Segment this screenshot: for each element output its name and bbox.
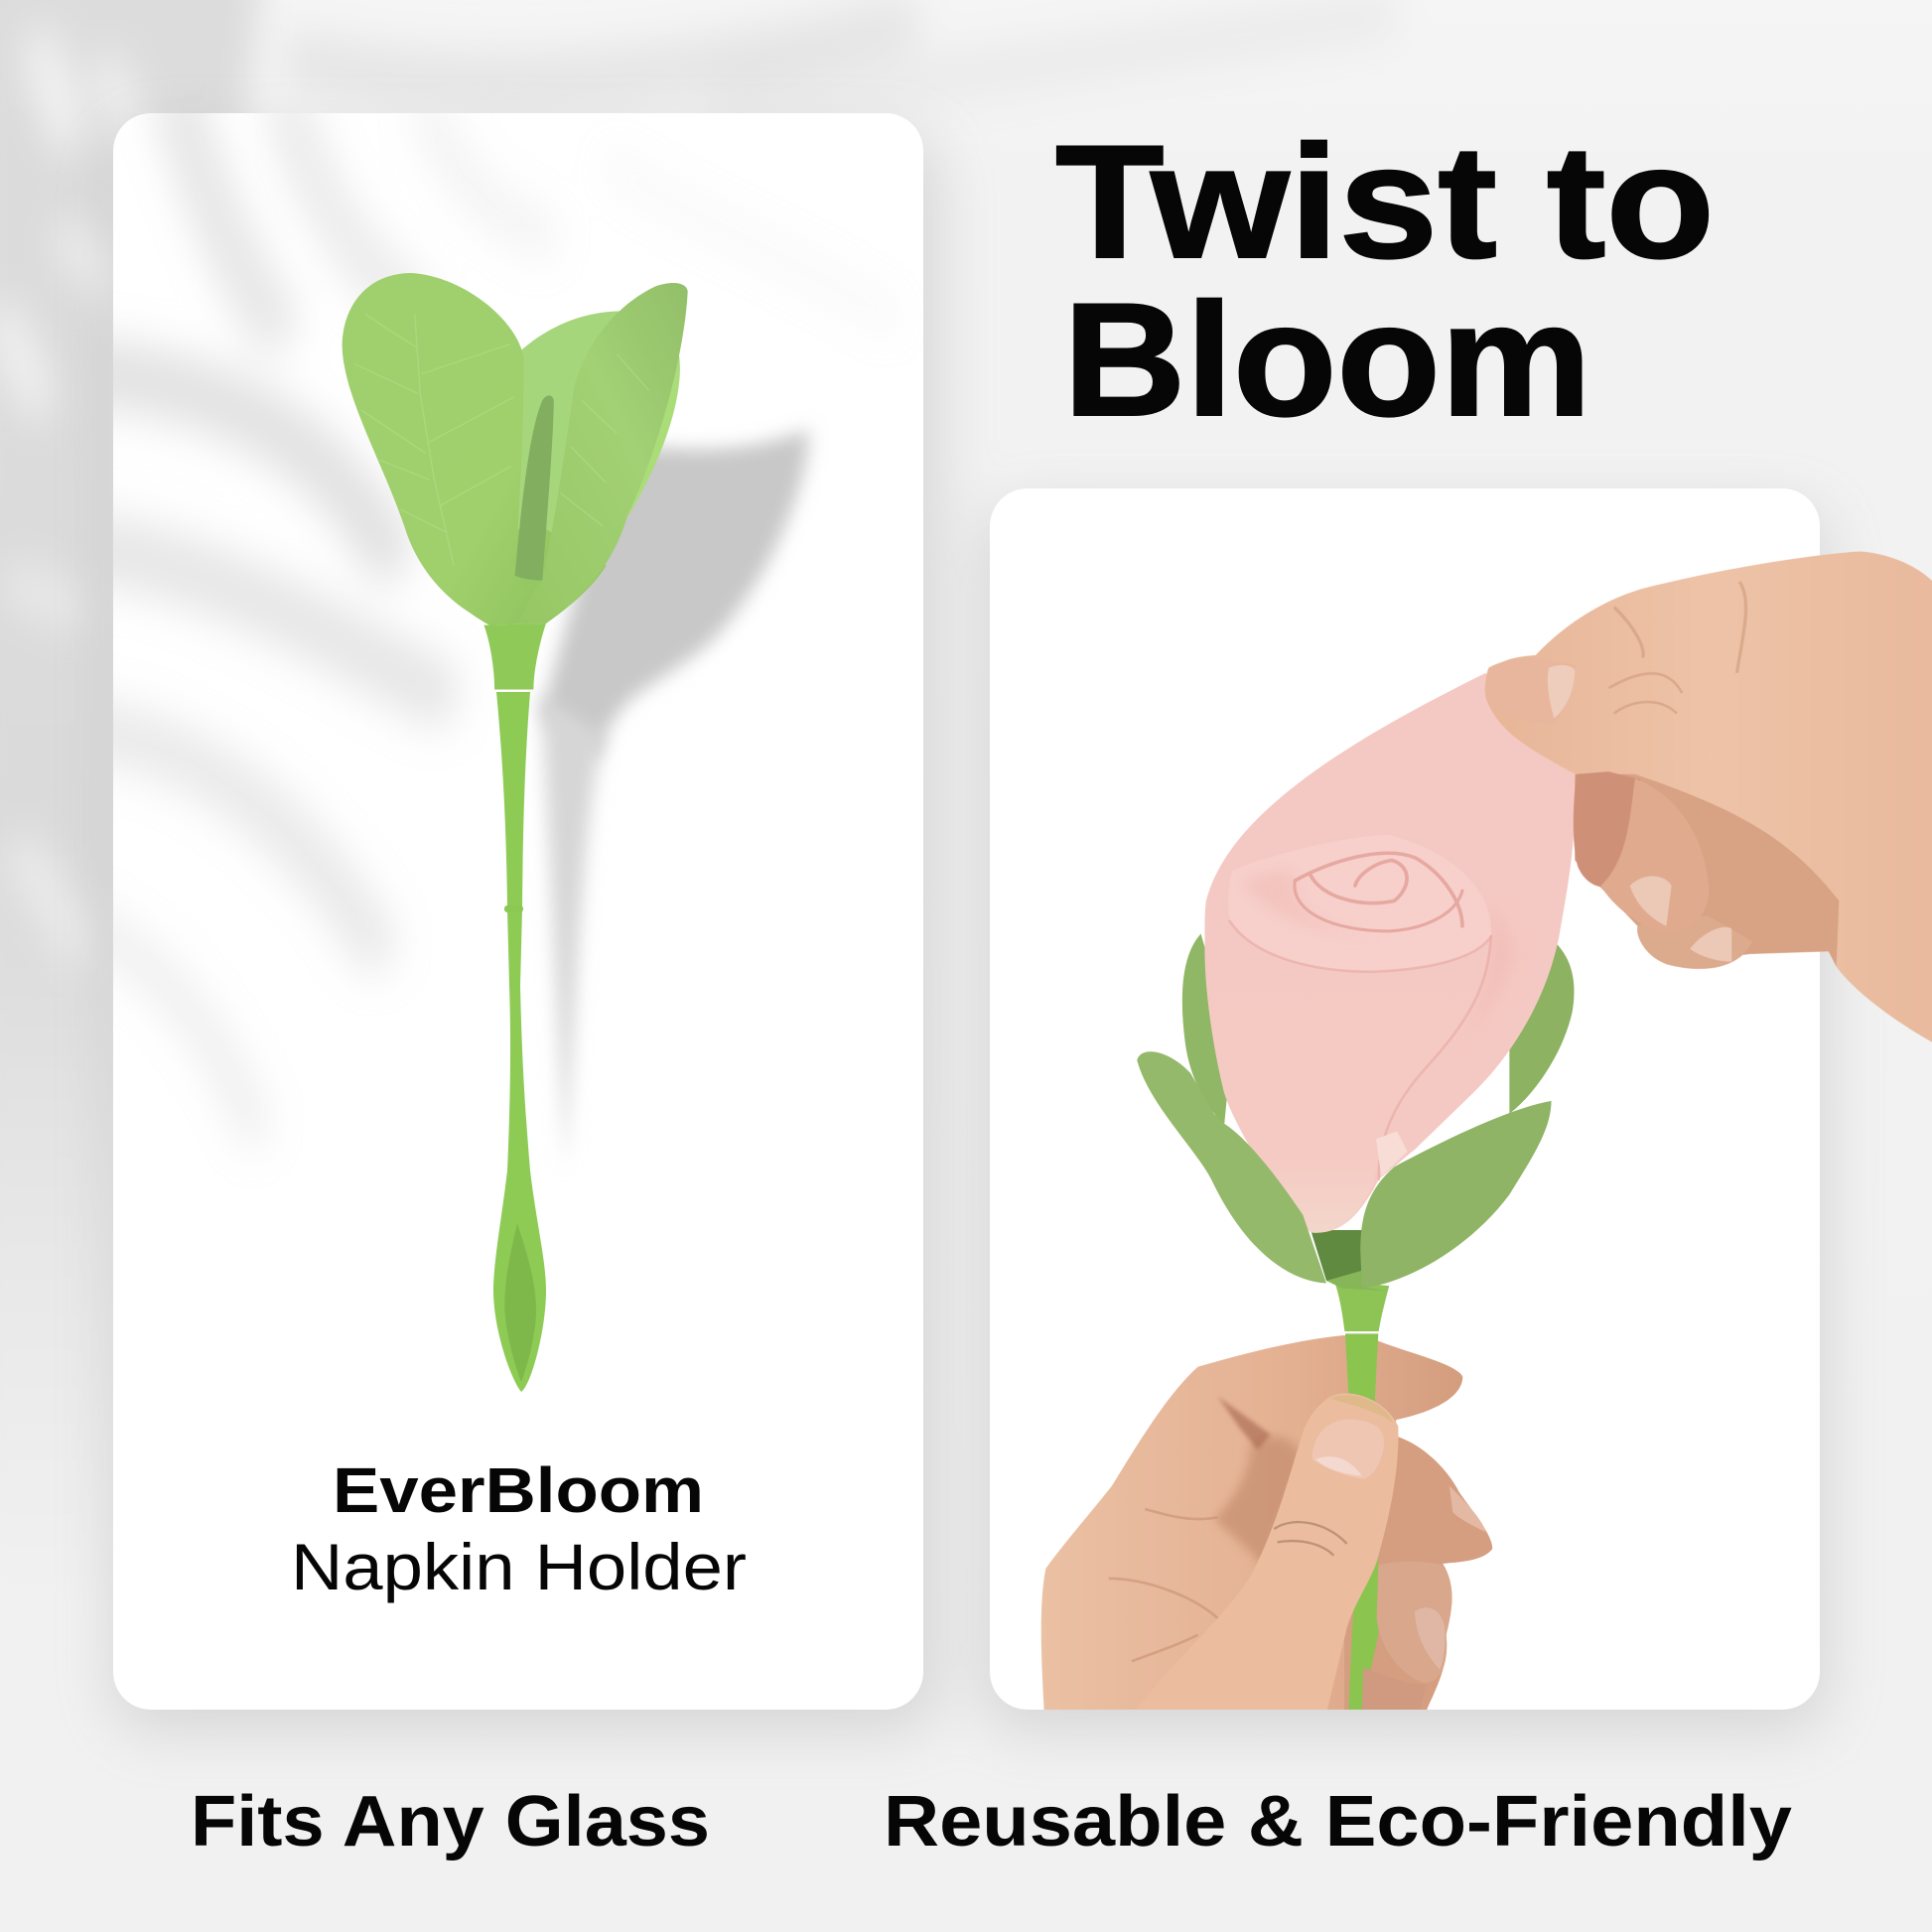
caption: reusable and eco-friendly: Reusable & Eco-Friendly	[884, 1782, 1792, 1862]
stem node	[504, 905, 523, 912]
thumb nail moon	[1315, 1456, 1362, 1476]
hand silhouette	[1485, 551, 1932, 1042]
palm underside	[1575, 759, 1845, 967]
fingertip nail	[1449, 1486, 1486, 1532]
top hand	[1485, 551, 1932, 1042]
thumb	[1217, 1394, 1398, 1710]
caption: fits any glass: Fits Any Glass	[191, 1782, 710, 1862]
product name: EverBloom	[333, 1454, 704, 1526]
flower cast shadow	[541, 429, 809, 1172]
back fingers	[1343, 1437, 1492, 1711]
fold at base	[1376, 1131, 1408, 1176]
rose with leaves	[1137, 673, 1576, 1331]
bottom hand	[1041, 1333, 1492, 1711]
calyx base	[483, 623, 546, 690]
lower stem	[1345, 1333, 1378, 1711]
panel: usage card	[990, 488, 1820, 1710]
background palm shadow	[0, 0, 1384, 1595]
card shadows	[113, 134, 1827, 1730]
stem tip groove	[504, 1223, 536, 1382]
nail highlight	[1548, 665, 1575, 719]
fourth finger	[1362, 1668, 1370, 1710]
finger nail lower	[1690, 927, 1731, 962]
back right leaf	[1509, 939, 1574, 1114]
title: Twist to	[1055, 112, 1715, 292]
title	[1055, 112, 1715, 450]
right leaf	[517, 283, 688, 623]
usage scene: hands and rose	[1041, 551, 1932, 1711]
roll shading	[1243, 870, 1373, 936]
left front leaf	[1137, 1051, 1326, 1284]
back left leaf	[1182, 934, 1232, 1124]
napkin roll	[1228, 835, 1491, 972]
thumb tip highlight	[1330, 1395, 1393, 1423]
lower finger nail	[1415, 1607, 1445, 1670]
flap inner shading	[1462, 900, 1515, 1042]
rose spiral	[1230, 853, 1491, 1179]
napkin flap	[1204, 673, 1576, 1233]
hand silhouette	[1041, 1335, 1462, 1711]
bowl	[440, 529, 607, 625]
palm shadow on card	[90, 114, 891, 1124]
napkin body	[1204, 921, 1488, 1233]
product name: Napkin Holder	[291, 1530, 747, 1603]
slot	[514, 395, 554, 581]
back leaf sliver	[627, 357, 679, 517]
thumb nail	[1312, 1420, 1384, 1479]
leaf veins	[354, 315, 648, 566]
gap	[1311, 1230, 1363, 1281]
thumb tip	[1485, 659, 1575, 724]
finger nail	[1630, 876, 1672, 926]
shadow between fingers	[1214, 1437, 1304, 1569]
index finger	[1574, 771, 1640, 887]
knuckle crease	[1218, 1397, 1271, 1449]
title: Bloom	[1063, 270, 1591, 450]
thumb crease	[1608, 673, 1682, 714]
middle finger	[1601, 778, 1709, 934]
cone	[1334, 1281, 1389, 1331]
panel: product card	[113, 113, 923, 1710]
finger behind	[1637, 916, 1752, 969]
third finger	[1377, 1562, 1451, 1683]
thumb knuckle	[1274, 1522, 1347, 1556]
product: EverBloom napkin holder	[343, 273, 688, 1392]
calyx base	[1326, 1271, 1389, 1291]
product name	[291, 1454, 747, 1603]
back leaf	[510, 311, 680, 579]
left leaf	[343, 273, 546, 623]
stem	[493, 692, 546, 1392]
right front leaf	[1360, 1101, 1552, 1289]
knuckle creases	[1614, 582, 1746, 673]
